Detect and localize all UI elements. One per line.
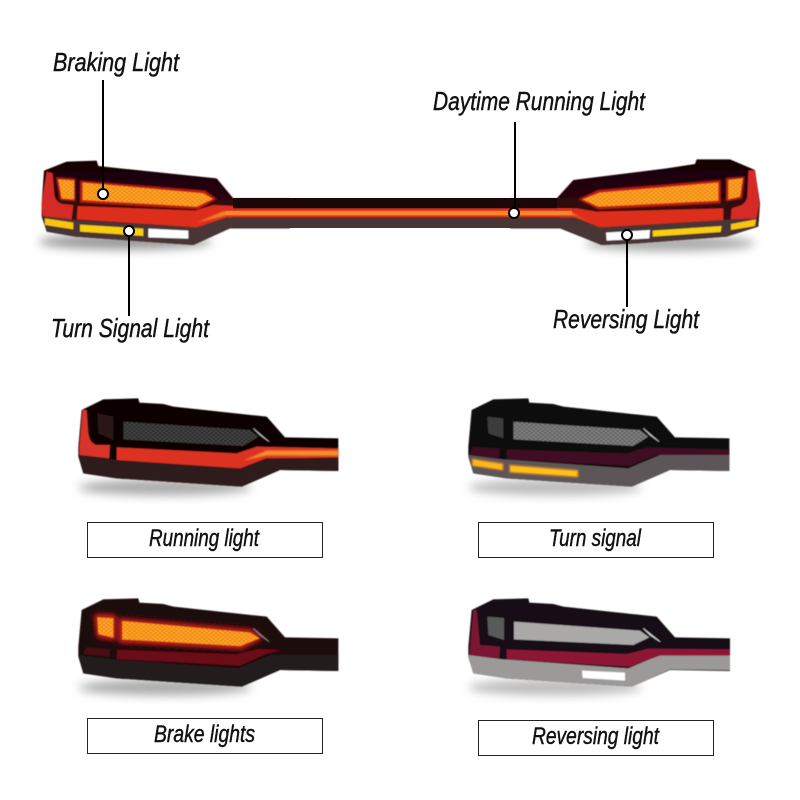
full tail light assembly [38, 159, 760, 251]
label box: turn signal: Turn signal [549, 525, 642, 552]
label box: brake lights [88, 718, 322, 754]
panel: brake lights lamp [78, 598, 338, 695]
callout: daytime running light: Daytime Running Light [433, 86, 646, 116]
panel: reversing light lamp [468, 598, 730, 695]
callout: braking light: Braking Light [53, 47, 180, 77]
callout: braking light [53, 47, 180, 199]
label box: reversing light: Reversing light [532, 723, 660, 750]
label box: running light: Running light [149, 525, 260, 552]
callout: daytime running light [433, 86, 646, 218]
label box: brake lights: Brake lights [154, 721, 255, 748]
center light bar [226, 198, 572, 228]
callout: turn signal light [51, 226, 210, 343]
label box: running light [88, 522, 322, 558]
label box: reversing light [478, 720, 714, 756]
label box: turn signal [478, 522, 714, 558]
right lamp [510, 159, 760, 251]
callout: turn signal light: Turn Signal Light [51, 313, 210, 343]
left lamp [38, 161, 290, 250]
callout: reversing light [553, 230, 700, 334]
panel: running light lamp [78, 398, 338, 495]
panel: turn signal lamp [468, 398, 729, 495]
callout: reversing light: Reversing Light [553, 304, 700, 334]
